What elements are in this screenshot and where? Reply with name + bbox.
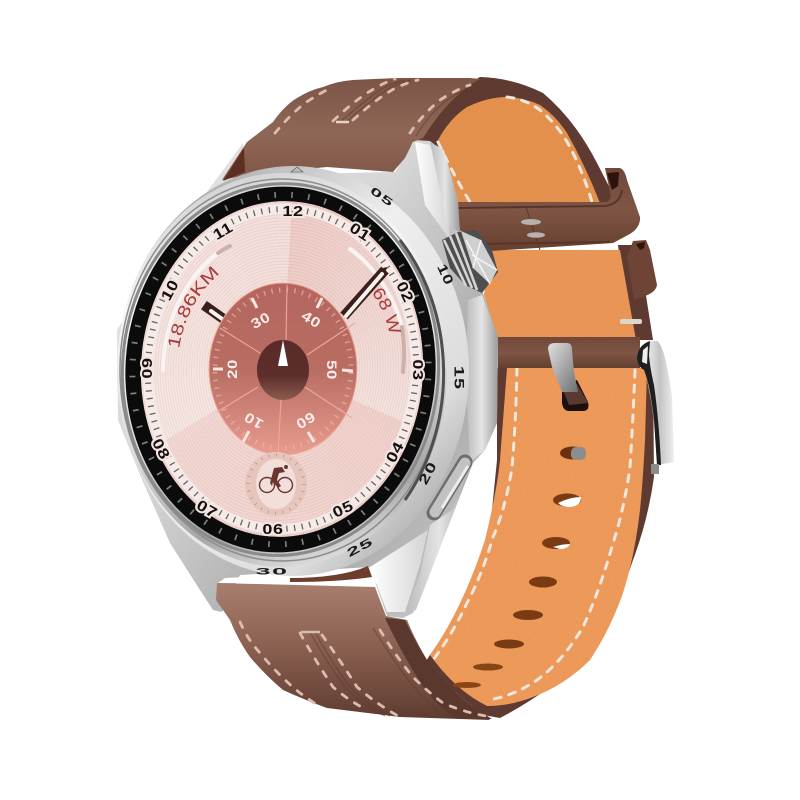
scale label: 30: 30 <box>255 567 289 577</box>
numeral 07: 07 <box>194 496 220 522</box>
right progress arc <box>350 249 404 372</box>
cycling complication <box>245 452 307 516</box>
buckle frame <box>637 341 674 474</box>
numeral 12: 12 <box>282 202 304 220</box>
crown <box>442 230 498 293</box>
front strap, upper <box>222 78 480 181</box>
left progress arc <box>163 246 230 370</box>
numeral 01: 01 <box>346 219 374 245</box>
brown strap band across lining <box>498 337 640 368</box>
strap holes <box>453 446 586 688</box>
center pointer <box>278 340 288 366</box>
black tachymeter ring <box>115 177 446 562</box>
sub-dial label 30: 30 <box>249 310 273 332</box>
dial face with sectors and guilloche rings <box>131 193 433 545</box>
dial numerals <box>138 202 427 538</box>
hour hand <box>208 308 225 321</box>
scale label: 20: 20 <box>416 459 440 487</box>
dial minute ticks <box>138 201 426 537</box>
scale label: 10: 10 <box>434 262 456 288</box>
sub-dial label 10: 10 <box>242 408 266 432</box>
scale label: 05: 05 <box>368 184 396 210</box>
outer tapered bezel with scale <box>111 166 469 577</box>
minute hand <box>344 267 387 316</box>
front strap, lower <box>216 583 493 720</box>
buckle tongue <box>548 343 588 411</box>
back strap: middle orange section <box>484 245 653 340</box>
numeral 04: 04 <box>382 438 408 465</box>
numeral 03: 03 <box>409 359 427 381</box>
power reading: 268 W <box>364 284 402 332</box>
sub-dial major ticks <box>213 298 353 442</box>
scale label: 25: 25 <box>344 534 376 560</box>
bezel marker triangle <box>291 167 303 172</box>
center hub <box>257 340 309 400</box>
lower strap: brown edge, orange lining, stitching <box>400 368 654 718</box>
sub-dial dividers <box>217 285 355 455</box>
numeral 02: 02 <box>393 279 417 305</box>
speed sub-dial <box>209 283 357 455</box>
side button <box>434 462 468 513</box>
brown keeper loop, lower <box>627 240 657 300</box>
back strap: upper dark edge and orange lining <box>405 77 616 208</box>
numeral 05: 05 <box>330 497 356 521</box>
numeral 11: 11 <box>210 218 236 244</box>
numeral 06: 06 <box>262 520 284 538</box>
case body with lugs <box>117 140 498 618</box>
icon: cyclist <box>260 465 292 492</box>
numeral 09: 09 <box>138 357 156 379</box>
sub-dial label 40: 40 <box>298 308 324 332</box>
numeral 08: 08 <box>148 436 174 462</box>
numeral 10: 10 <box>157 277 183 303</box>
brown keeper loop, upper <box>455 168 640 251</box>
sub-dial label 20: 20 <box>225 359 241 379</box>
distance reading: 18.86KM <box>168 266 219 348</box>
sub-dial label 60: 60 <box>293 408 317 432</box>
sub-dial label 50: 50 <box>323 360 339 380</box>
scale label: 15: 15 <box>451 366 467 390</box>
